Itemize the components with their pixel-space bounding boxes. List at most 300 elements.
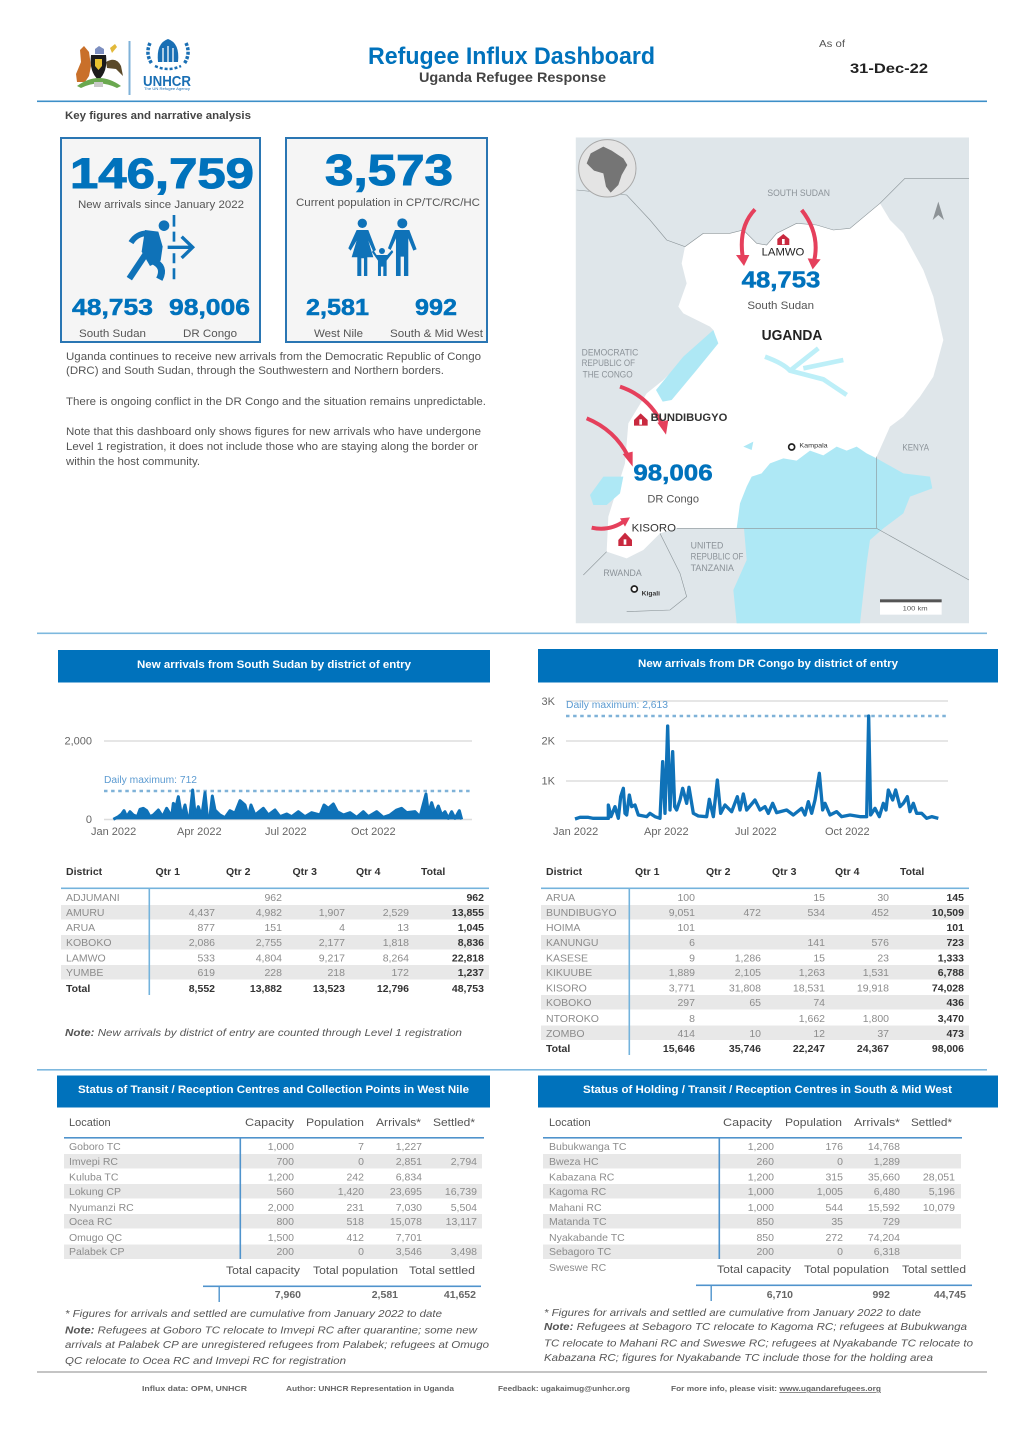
table: South and Mid West centres: 544 [825, 1202, 843, 1214]
totals: South and Mid West: 992 [872, 1289, 890, 1301]
country labels: SOUTH SUDAN [767, 188, 830, 198]
table: South Sudan arrivals by district: 4,982 [256, 907, 282, 919]
panel: West Nile status header: Status of Transit / Reception Centres and Collection Points in West Nile [78, 1084, 469, 1096]
table: West Nile centres: 7,701 [396, 1232, 422, 1244]
table: West Nile centres: 800 [276, 1216, 294, 1228]
table: DR Congo arrivals by district: 6,788 [938, 967, 964, 979]
map figure: South Sudan [742, 271, 820, 309]
table: South Sudan arrivals by district: 1,237 [458, 967, 484, 979]
narrative text: Uganda continues to receive new arrivals from the Democratic Republic of Congo [66, 351, 481, 363]
table: South Sudan arrivals by district: 172 [391, 967, 409, 979]
table: West Nile centres: 231 [346, 1202, 364, 1214]
line chart: DR Congo daily arrivals: Jul 2022 [735, 826, 777, 838]
panel: South and Mid West status header: Status of Holding / Transit / Reception Centres in South & Mid West [583, 1084, 952, 1096]
table: South and Mid West centres: 176 [825, 1141, 843, 1153]
notes: West Nile: arrivals at Palabek CP are unregistered refugees from Palabek; refugees at Omugo [65, 1339, 489, 1351]
table: DR Congo arrivals by district: Qtr 3 [772, 866, 797, 878]
table: South Sudan arrivals by district: 962 [466, 892, 484, 904]
line chart: South Sudan daily arrivals: Apr 2022 [177, 826, 222, 838]
table: South and Mid West centres: 0 [837, 1156, 843, 1168]
line chart: DR Congo daily arrivals: 3K [542, 696, 556, 708]
table: South and Mid West centres: 10,079 [923, 1202, 955, 1214]
totals: West Nile: 7,960 [275, 1289, 301, 1301]
totals: South and Mid West: 6,710 [767, 1289, 793, 1301]
table: DR Congo arrivals by district: District [546, 866, 583, 878]
table: DR Congo arrivals by district: 101 [946, 922, 964, 934]
line chart: DR Congo daily arrivals: Daily maximum: 2,613 [566, 700, 668, 711]
totals: West Nile: Total settled [409, 1265, 475, 1277]
table: South and Mid West centres: 1,200 [748, 1141, 774, 1153]
table: South Sudan arrivals by district: 962 [264, 892, 282, 904]
table: DR Congo arrivals by district: 74 [813, 997, 825, 1009]
stat: DR Congo [169, 294, 250, 340]
capitals [631, 442, 828, 598]
map: Uganda [576, 137, 969, 623]
table: South and Mid West centres: 850 [756, 1232, 774, 1244]
table: DR Congo arrivals by district: 10,509 [932, 907, 964, 919]
table: South and Mid West centres: 28,051 [923, 1172, 955, 1184]
place labels: LAMWO [762, 247, 804, 259]
table: South and Mid West centres: 6,318 [874, 1246, 900, 1258]
table: West Nile centres: 13,117 [446, 1216, 477, 1228]
table: DR Congo arrivals by district: 24,367 [857, 1043, 889, 1055]
table: DR Congo arrivals by district: BUNDIBUGYO [546, 907, 617, 919]
table: South Sudan arrivals by district: 533 [197, 952, 215, 964]
table: South and Mid West centres: Settled* [911, 1117, 953, 1129]
table: South and Mid West centres: Kagoma RC [549, 1186, 607, 1198]
map: Uganda: TANZANIA [691, 563, 735, 573]
notes: South and Mid West: Kabazana RC; figures for Nyakabande TC include those for the holding area [544, 1352, 933, 1364]
line chart: South Sudan daily arrivals: Oct 2022 [351, 826, 396, 838]
lakes [590, 330, 932, 623]
table: South Sudan arrivals by district: 4,804 [256, 952, 282, 964]
table: West Nile centres: Palabek CP [69, 1246, 124, 1258]
table: South and Mid West centres: Nyakabande TC [549, 1232, 625, 1244]
date label: As of [819, 39, 845, 50]
table: South and Mid West centres: Sebagoro TC [549, 1246, 612, 1258]
table: DR Congo arrivals by district: 19,918 [857, 982, 889, 994]
stat: South and Mid West: 992 [415, 294, 457, 320]
table: West Nile centres [64, 1117, 484, 1259]
table: South and Mid West centres: 1,200 [748, 1172, 774, 1184]
table: DR Congo arrivals by district: 15,646 [663, 1043, 695, 1055]
panel: South Sudan chart header: New arrivals from South Sudan by district of entry [137, 659, 412, 671]
panel: DR Congo chart header [538, 649, 998, 682]
table: South Sudan arrivals by district: 228 [264, 967, 282, 979]
totals: South and Mid West [696, 1264, 972, 1301]
table: DR Congo arrivals by district: 74,028 [932, 982, 964, 994]
table: DR Congo arrivals by district: 15 [813, 952, 825, 964]
logo: UNHCR [143, 39, 191, 91]
table: DR Congo arrivals by district: 473 [946, 1028, 964, 1040]
table: DR Congo arrivals by district: 100 [677, 892, 695, 904]
table: DR Congo arrivals by district: 23 [877, 952, 889, 964]
notes: South and Mid West [544, 1307, 973, 1364]
table: South Sudan arrivals by district: ADJUMANI [66, 892, 120, 904]
table: South and Mid West centres: Mahani RC [549, 1202, 602, 1214]
table: DR Congo arrivals by district: 472 [743, 907, 761, 919]
table: South Sudan arrivals by district: 48,753 [452, 983, 484, 995]
panel: current population [286, 138, 487, 342]
table: South Sudan arrivals by district: 619 [197, 967, 215, 979]
house icons [618, 234, 789, 546]
table: DR Congo arrivals by district: 1,889 [669, 967, 695, 979]
table: South Sudan arrivals by district: YUMBE [66, 967, 103, 979]
table: West Nile centres: 1,200 [268, 1172, 294, 1184]
table: South Sudan arrivals by district: AMURU [66, 907, 104, 919]
table: DR Congo arrivals by district: 9 [689, 952, 695, 964]
table: West Nile centres: Goboro TC [69, 1141, 121, 1153]
line chart: DR Congo daily arrivals: 1K [542, 776, 556, 788]
table: West Nile centres: Nyumanzi RC [69, 1202, 134, 1214]
footer [142, 1384, 881, 1393]
table: DR Congo arrivals by district: ARUA [546, 892, 575, 904]
table: West Nile centres: 15,078 [390, 1216, 422, 1228]
table: South and Mid West centres: Population [785, 1117, 842, 1129]
table: South and Mid West centres: Capacity [723, 1117, 773, 1129]
map figure: DR Congo [634, 464, 712, 505]
table: South and Mid West centres: 1,005 [817, 1186, 843, 1198]
stat: South and Mid West [390, 294, 483, 340]
line chart: DR Congo daily arrivals: Oct 2022 [825, 826, 870, 838]
table: South Sudan arrivals by district: 8,552 [189, 983, 215, 995]
table: South and Mid West centres: 1,000 [748, 1202, 774, 1214]
table: South Sudan arrivals by district: 2,177 [319, 937, 345, 949]
table: West Nile centres: 6,834 [396, 1172, 422, 1184]
table: West Nile centres: 1,227 [396, 1141, 422, 1153]
caption: Current population in CP/TC/RC/HC [296, 197, 480, 209]
table: West Nile centres: Population [306, 1117, 364, 1129]
big number: 146,759 [70, 150, 254, 198]
table: DR Congo arrivals by district: 31,808 [729, 982, 761, 994]
inset globe [579, 140, 636, 197]
table: South and Mid West centres: 272 [825, 1232, 843, 1244]
table: South and Mid West centres: 315 [825, 1172, 843, 1184]
table: South and Mid West centres: 850 [756, 1216, 774, 1228]
map: Uganda: REPUBLIC OF [691, 551, 744, 561]
totals: West Nile: 41,652 [444, 1289, 476, 1301]
table: DR Congo arrivals by district: 723 [946, 937, 964, 949]
table: South Sudan arrivals by district [61, 866, 489, 995]
capitals: Kigali [642, 591, 660, 598]
table: DR Congo arrivals by district: 3,771 [669, 982, 695, 994]
table: DR Congo arrivals by district [541, 866, 969, 1055]
notes: West Nile: Note: Refugees at Goboro TC relocate to Imvepi RC after quarantine; some new [65, 1324, 479, 1336]
narrative text: within the host community. [65, 456, 200, 468]
table: South and Mid West centres: 74,204 [868, 1232, 900, 1244]
stat: South Sudan: 48,753 [72, 294, 153, 320]
map: Uganda: BUNDIBUGYO [651, 412, 728, 424]
scale bar: 100 km [903, 606, 928, 613]
table: West Nile centres: 1,420 [338, 1186, 364, 1198]
table: West Nile centres: Capacity [245, 1117, 295, 1129]
totals: West Nile [203, 1265, 481, 1302]
stat: DR Congo: DR Congo [183, 328, 237, 340]
table: DR Congo arrivals by district: 145 [946, 892, 964, 904]
north arrow [933, 202, 944, 220]
narrative text: Note that this dashboard only shows figures for new arrivals who have undergone [66, 426, 481, 438]
table: South Sudan arrivals by district: 2,755 [256, 937, 282, 949]
table: DR Congo arrivals by district: 452 [871, 907, 889, 919]
table: DR Congo arrivals by district: 37 [877, 1028, 889, 1040]
table: West Nile centres: Location [69, 1117, 111, 1129]
table: South Sudan arrivals by district: 22,818 [452, 952, 484, 964]
stat: West Nile [306, 294, 369, 340]
table: DR Congo arrivals by district: Qtr 1 [635, 866, 660, 878]
table: West Nile centres: 2,794 [451, 1156, 477, 1168]
table: DR Congo arrivals by district: 15 [813, 892, 825, 904]
capitals: Kampala [799, 442, 828, 449]
panel: South Sudan chart header [58, 650, 490, 682]
notes: South and Mid West: Note: Refugees at Sebagoro TC relocate to Kagoma RC; refugees at Bubukwanga [544, 1321, 967, 1333]
line chart: South Sudan daily arrivals: Daily maximum: 712 [104, 775, 197, 786]
table: DR Congo arrivals by district: 436 [946, 997, 964, 1009]
table: DR Congo arrivals by district: KISORO [546, 982, 587, 994]
table: West Nile centres: Kuluba TC [69, 1172, 119, 1184]
icon: family [348, 218, 417, 276]
table: South Sudan arrivals by district: 218 [327, 967, 345, 979]
table: West Nile centres: 700 [276, 1156, 294, 1168]
table: West Nile centres: Omugo QC [69, 1232, 123, 1244]
map figure: DR Congo: DR Congo [647, 493, 699, 505]
table: DR Congo arrivals by district: 22,247 [793, 1043, 825, 1055]
table: DR Congo arrivals by district: 8 [689, 1013, 695, 1025]
table: West Nile centres: 0 [358, 1156, 364, 1168]
table: DR Congo arrivals by district: 1,286 [735, 952, 761, 964]
section heading: key figures: Key figures and narrative analysis [65, 110, 251, 122]
table: South Sudan arrivals by district: District [66, 866, 103, 878]
table: West Nile centres: 560 [276, 1186, 294, 1198]
map: Uganda: THE CONGO [583, 370, 633, 380]
table: South Sudan arrivals by district: 1,045 [458, 922, 484, 934]
table: West Nile centres: Arrivals* [376, 1117, 422, 1129]
table: West Nile centres: 5,504 [451, 1202, 477, 1214]
table: West Nile centres: Lokung CP [69, 1186, 121, 1198]
table: South Sudan arrivals by district: 8,264 [383, 952, 409, 964]
stat: West Nile: West Nile [314, 328, 363, 340]
table: South Sudan arrivals by district: Qtr 1 [156, 866, 180, 878]
scale bar [880, 599, 942, 615]
table: DR Congo arrivals by district: 30 [877, 892, 889, 904]
caption: New arrivals since January 2022 [78, 199, 244, 211]
table: South and Mid West centres: 6,480 [874, 1186, 900, 1198]
table: South Sudan arrivals by district: Qtr 4 [356, 866, 381, 878]
table: DR Congo arrivals by district: 10 [749, 1028, 761, 1040]
table: South and Mid West centres: Arrivals* [854, 1117, 901, 1129]
table: West Nile centres: 2,000 [268, 1202, 294, 1214]
totals: South and Mid West: Total settled [902, 1264, 966, 1276]
subtitle: Uganda Refugee Response [419, 69, 606, 85]
narrative text: Level 1 registration, it does not include those who are staying along the border or [66, 441, 478, 453]
table: West Nile centres: 7,030 [396, 1202, 422, 1214]
table: South Sudan arrivals by district: 1,907 [319, 907, 345, 919]
table: DR Congo arrivals by district: 2,105 [735, 967, 761, 979]
title: Refugee Influx Dashboard [368, 43, 655, 70]
logo: UNHCR: The UN Refugee Agency [144, 87, 190, 91]
table: West Nile centres: 412 [346, 1232, 364, 1244]
map: Uganda: DEMOCRATIC [582, 348, 639, 358]
totals: West Nile: 2,581 [372, 1289, 398, 1301]
logo divider [128, 41, 130, 95]
table: West Nile centres: Ocea RC [69, 1216, 113, 1228]
line chart: South Sudan daily arrivals: Jul 2022 [265, 826, 307, 838]
totals: South and Mid West: 44,745 [934, 1289, 966, 1301]
table: South Sudan arrivals by district: KOBOKO [66, 937, 112, 949]
table: West Nile centres: 3,498 [451, 1246, 477, 1258]
totals: South and Mid West: Total population [804, 1264, 889, 1276]
table: DR Congo arrivals by district: 1,531 [863, 967, 889, 979]
table: DR Congo arrivals by district: KANUNGU [546, 937, 599, 949]
table: South Sudan arrivals by district: 4,437 [189, 907, 215, 919]
red arrows [587, 209, 816, 529]
table: South and Mid West centres: 729 [882, 1216, 900, 1228]
table: South Sudan arrivals by district: 151 [264, 922, 282, 934]
table: South Sudan arrivals by district: Qtr 3 [292, 866, 317, 878]
line chart: DR Congo daily arrivals: 2K [542, 736, 556, 748]
table: South and Mid West centres: Location [549, 1117, 591, 1129]
table: South and Mid West centres: 200 [756, 1246, 774, 1258]
table: South Sudan arrivals by district: 12,796 [377, 983, 409, 995]
stat: South Sudan [72, 294, 153, 340]
table: South Sudan arrivals by district: 8,836 [458, 937, 484, 949]
table: West Nile centres: 242 [346, 1172, 364, 1184]
table: West Nile centres: 1,000 [268, 1141, 294, 1153]
big number: 3,573 [325, 146, 453, 195]
map: Uganda: UNITED [691, 540, 724, 550]
line chart: South Sudan daily arrivals: 2,000 [64, 736, 92, 748]
table: West Nile centres: 1,500 [268, 1232, 294, 1244]
table: DR Congo arrivals by district: 65 [749, 997, 761, 1009]
table: South Sudan arrivals by district: 2,086 [189, 937, 215, 949]
stat: South Sudan: South Sudan [79, 328, 146, 340]
map: Uganda: UGANDA [762, 328, 823, 344]
table: DR Congo arrivals by district: 98,006 [932, 1043, 964, 1055]
table: South and Mid West centres: 5,196 [929, 1186, 955, 1198]
table: DR Congo arrivals by district: 35,746 [729, 1043, 761, 1055]
line chart: South Sudan daily arrivals [64, 736, 472, 838]
notes: South and Mid West: * Figures for arrivals and settled are cumulative from January 2022 to date [544, 1307, 921, 1319]
table: DR Congo arrivals by district: ZOMBO [546, 1028, 584, 1040]
table: South and Mid West centres: Kabazana RC [549, 1172, 615, 1184]
table: South and Mid West centres [543, 1117, 962, 1274]
footer: Author: UNHCR Representation in Uganda [286, 1384, 455, 1393]
table: DR Congo arrivals by district: 18,531 [793, 982, 825, 994]
table: South and Mid West centres: 0 [837, 1246, 843, 1258]
table: West Nile centres: 518 [346, 1216, 364, 1228]
map: Uganda: KENYA [902, 442, 930, 452]
totals: West Nile: Total capacity [226, 1265, 301, 1277]
table: DR Congo arrivals by district: 297 [677, 997, 695, 1009]
stat: DR Congo: 98,006 [169, 294, 250, 320]
table: DR Congo arrivals by district: 1,263 [799, 967, 825, 979]
table: South and Mid West centres: 1,289 [874, 1156, 900, 1168]
line chart: DR Congo daily arrivals [542, 696, 948, 838]
table: South Sudan arrivals by district: 13 [397, 922, 409, 934]
table: DR Congo arrivals by district: Qtr 2 [706, 866, 731, 878]
narrative text [65, 351, 486, 468]
line chart: DR Congo daily arrivals: Apr 2022 [644, 826, 689, 838]
table: South Sudan arrivals by district: 877 [197, 922, 215, 934]
table: South Sudan arrivals by district: Total [421, 866, 445, 878]
totals: South and Mid West: Total capacity [717, 1264, 792, 1276]
table: DR Congo arrivals by district: NTOROKO [546, 1013, 599, 1025]
note: level 1 registration: Note: New arrivals by district of entry are counted through Level 1 registration [65, 1027, 462, 1039]
table: South Sudan arrivals by district: Total [66, 983, 90, 995]
table: South and Mid West centres: 15,592 [868, 1202, 900, 1214]
table: DR Congo arrivals by district: Total [546, 1043, 570, 1055]
map figure: DR Congo: 98,006 [633, 460, 713, 486]
table: DR Congo arrivals by district: KOBOKO [546, 997, 592, 1009]
table: South Sudan arrivals by district: ARUA [66, 922, 95, 934]
table: West Nile centres: Imvepi RC [69, 1156, 118, 1168]
map figure: South Sudan: 48,753 [742, 267, 820, 293]
table: West Nile centres: 3,546 [396, 1246, 422, 1258]
panel: new arrivals [61, 138, 260, 342]
notes: West Nile [65, 1308, 489, 1367]
table: South Sudan arrivals by district: LAMWO [66, 952, 106, 964]
table: DR Congo arrivals by district: KASESE [546, 952, 588, 964]
table: DR Congo arrivals by district: 141 [807, 937, 825, 949]
table: West Nile centres: Settled* [433, 1117, 476, 1129]
footer: For more info, please visit: www.ugandarefugees.org [671, 1384, 881, 1393]
table: DR Congo arrivals by district: KIKUUBE [546, 967, 592, 979]
table: South Sudan arrivals by district: 13,523 [313, 983, 345, 995]
map: Uganda: KISORO [632, 522, 676, 534]
Uganda territory [607, 203, 943, 558]
table: DR Congo arrivals by district: HOIMA [546, 922, 580, 934]
table: DR Congo arrivals by district: 6 [689, 937, 695, 949]
table: DR Congo arrivals by district: 101 [677, 922, 695, 934]
logo: UNHCR: UNHCR [143, 73, 191, 90]
logo: Uganda coat of arms [76, 44, 123, 88]
table: DR Congo arrivals by district: 534 [807, 907, 825, 919]
notes: South and Mid West: TC relocate to Mahani RC and Sweswe RC; refugees at Nyakabande TC relocate to [544, 1338, 973, 1350]
stat: South and Mid West: South & Mid West [390, 328, 483, 340]
table: South Sudan arrivals by district: 2,529 [383, 907, 409, 919]
table: DR Congo arrivals by district: 576 [871, 937, 889, 949]
table: DR Congo arrivals by district: 1,662 [799, 1013, 825, 1025]
notes: West Nile: * Figures for arrivals and settled are cumulative from January 2022 to date [65, 1308, 442, 1320]
table: DR Congo arrivals by district: Total [900, 866, 924, 878]
table: South Sudan arrivals by district: 4 [339, 922, 345, 934]
table: DR Congo arrivals by district: Qtr 4 [835, 866, 860, 878]
table: DR Congo arrivals by district: 3,470 [938, 1013, 964, 1025]
map: Uganda: REPUBLIC OF [582, 358, 635, 368]
table: DR Congo arrivals by district: 1,333 [938, 952, 964, 964]
icon: person crossing border [129, 215, 193, 279]
narrative text: (DRC) and South Sudan, through the Southwestern and Northern borders. [66, 365, 444, 377]
line chart: South Sudan daily arrivals: Jan 2022 [91, 826, 136, 838]
line chart: South Sudan daily arrivals: 0 [86, 814, 92, 826]
table: DR Congo arrivals by district: 9,051 [669, 907, 695, 919]
borders [577, 178, 969, 612]
date: 31-Dec-22 [850, 60, 928, 76]
notes: West Nile: QC relocate to Ocea RC and Imvepi RC for registration [65, 1355, 346, 1367]
table: DR Congo arrivals by district: 12 [813, 1028, 825, 1040]
narrative text: There is ongoing conflict in the DR Congo and the situation remains unpredictable. [66, 396, 486, 408]
panel: South and Mid West status header [538, 1076, 998, 1108]
footer: Feedback: ugakaimug@unhcr.org [498, 1384, 630, 1393]
table: West Nile centres: 2,851 [396, 1156, 422, 1168]
table: West Nile centres: 16,739 [445, 1186, 477, 1198]
table: South Sudan arrivals by district: 13,855 [452, 907, 484, 919]
table: South and Mid West centres: Matanda TC [549, 1216, 607, 1228]
table: South and Mid West centres: Bweza HC [549, 1156, 599, 1168]
table: South and Mid West centres: 35,660 [868, 1172, 900, 1184]
line chart: DR Congo daily arrivals: Jan 2022 [553, 826, 598, 838]
panel: DR Congo chart header: New arrivals from DR Congo by district of entry [638, 658, 899, 670]
table: South and Mid West centres: 260 [756, 1156, 774, 1168]
